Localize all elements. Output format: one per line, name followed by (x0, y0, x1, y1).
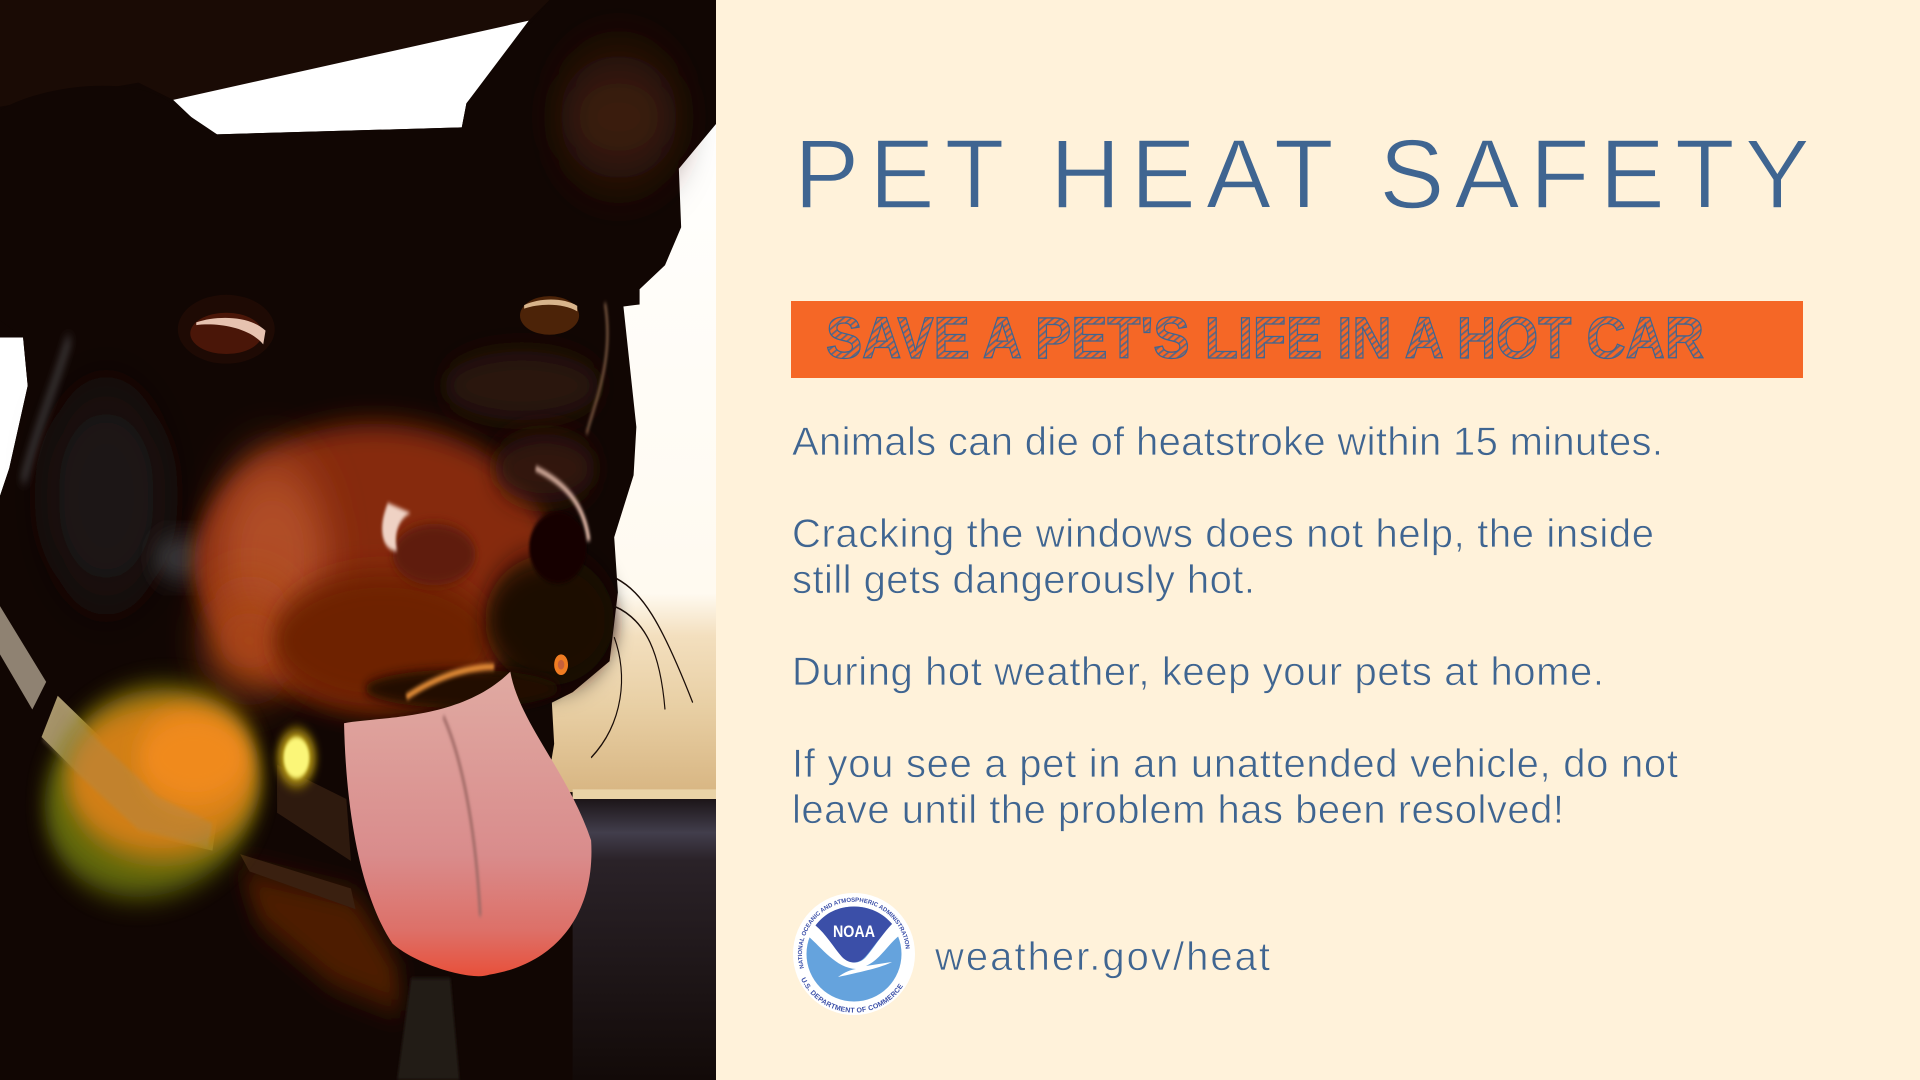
head shading (46, 393, 166, 599)
logo ring text: NATIONAL OCEANIC AND ATMOSPHERIC ADMINISTRATION (798, 898, 910, 969)
fact: unattended vehicle: leave until the problem has been resolved! (792, 788, 1564, 832)
logo ring text: U.S. DEPARTMENT OF COMMERCE (802, 977, 903, 1013)
lens flare (35, 654, 568, 917)
photo: panting dog in a car (0, 0, 739, 1080)
banner (791, 301, 1803, 378)
fact: heatstroke: Animals can die of heatstroke within 15 minutes. (792, 420, 1663, 464)
tongue (344, 672, 591, 976)
whiskers (591, 579, 693, 758)
banner text: SAVE A PET'S LIFE IN A HOT CAR (826, 306, 1704, 371)
fact: unattended vehicle: If you see a pet in an unattended vehicle, do not (792, 742, 1678, 786)
icon: NOAA logo: NOAA (833, 922, 875, 941)
icon: NOAA logo (793, 893, 915, 1015)
fact: keep at home: During hot weather, keep your pets at home. (792, 650, 1604, 694)
dog silhouette (0, 82, 716, 760)
fact: windows: Cracking the windows does not help, the inside (792, 512, 1654, 556)
fact: windows (792, 512, 1654, 602)
lower jaw glow (240, 868, 402, 1013)
logo ring text (798, 898, 910, 1013)
fact: windows: still gets dangerously hot. (792, 558, 1255, 602)
ear glow (559, 55, 679, 179)
chest (397, 978, 459, 1080)
title: PET HEAT SAFETY (794, 119, 1810, 229)
muzzle (194, 424, 614, 709)
fact: unattended vehicle (792, 742, 1678, 832)
eyes (178, 295, 579, 364)
body text (792, 420, 1678, 832)
collar (0, 606, 356, 909)
website link: weather.gov/heat (934, 935, 1270, 979)
